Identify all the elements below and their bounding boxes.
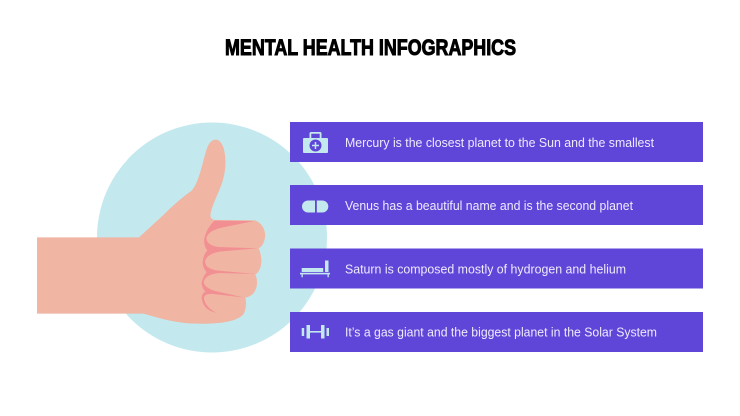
bar <box>290 248 703 288</box>
icon: dumbbell <box>302 325 329 338</box>
panel: Venus <box>290 185 703 225</box>
hand shape <box>37 140 265 324</box>
label: Mercury is the closest planet to the Sun and the smallest <box>345 136 655 150</box>
bar <box>290 312 703 352</box>
panel: Mercury <box>290 122 703 162</box>
bar <box>290 122 703 162</box>
icon: first aid kit <box>303 132 328 153</box>
icon: hospital bed <box>300 260 330 277</box>
panel: Jupiter <box>290 312 703 352</box>
label: Saturn is composed mostly of hydrogen and helium <box>345 262 626 276</box>
background circle <box>97 122 327 352</box>
bar <box>290 185 703 225</box>
icon: thumbs up hand <box>37 140 265 324</box>
label: It’s a gas giant and the biggest planet in the Solar System <box>345 326 657 340</box>
title: MENTAL HEALTH INFOGRAPHICS <box>225 35 516 60</box>
icon: pill capsule <box>302 200 328 212</box>
label: Venus has a beautiful name and is the second planet <box>345 199 634 213</box>
panel: Saturn <box>290 248 703 288</box>
finger creases <box>202 221 257 313</box>
